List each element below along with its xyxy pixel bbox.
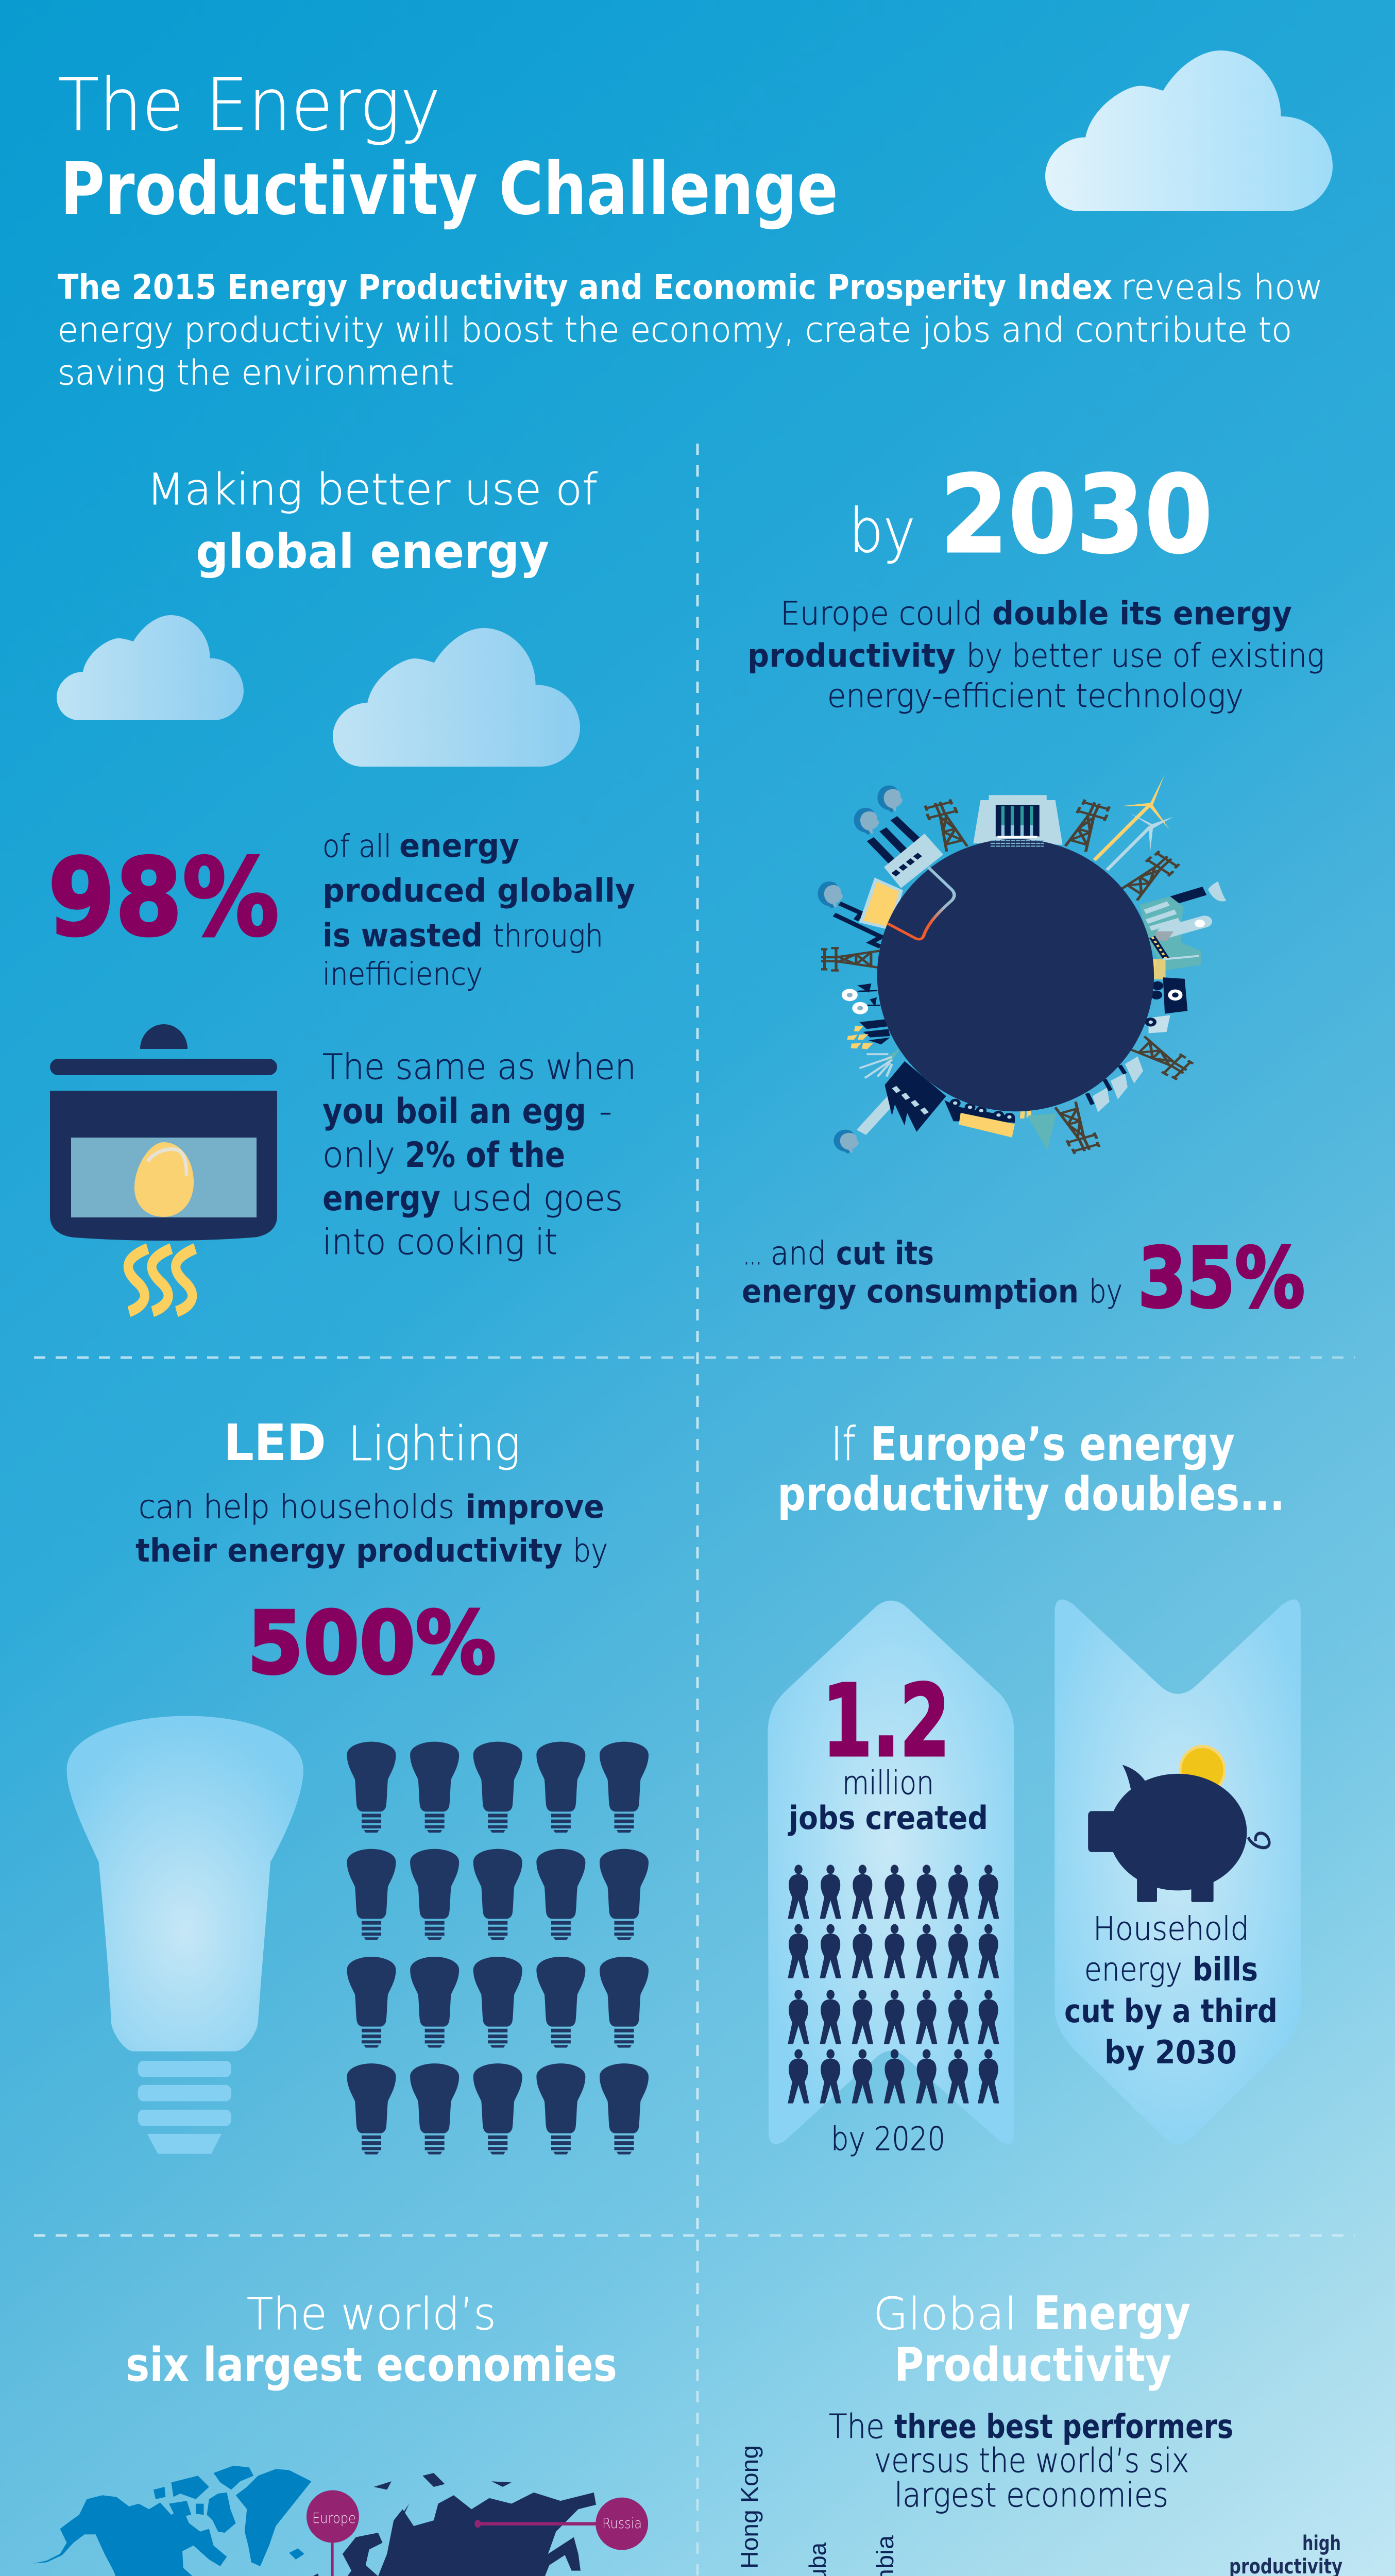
heading: global energy [147,464,598,579]
text: household energy bills: Household [1093,1910,1249,1947]
panel: global energy productivity [736,2286,1346,2576]
text: energy wasted: of all [322,828,392,865]
icon: large LED bulb [67,1716,303,2154]
intro text: saving the environment [58,353,454,393]
text: Europe could double [747,595,1324,715]
intro text: The 2015 Energy Productivity and Economic Prosperity Index [58,267,1112,307]
icon grid: small bulbs [347,1742,649,2155]
heading: global energy productivity [873,2286,1190,2392]
intro text: energy productivity will boost the economy, create jobs and contribute to [58,310,1292,350]
icon: small cloud [57,615,244,720]
heading: global energy: global energy [196,524,549,579]
panel: LED lighting [67,1414,649,2155]
text: energy wasted: produced globally [322,872,635,909]
title: The Energy [58,63,440,147]
heading: six largest economies: six largest economies [126,2338,617,2392]
illustration: globe with energy sources [818,775,1226,1154]
text: boil an egg: energy [322,1178,440,1219]
text: cut energy consumption: energy consumption [742,1273,1079,1310]
text: household energy bills: energy [1084,1951,1182,1988]
text: household energy bills [1064,1910,1278,2071]
heading: Europe's energy productivity doubles: Europe’s energy [870,1417,1235,1471]
text: energy wasted: is wasted [322,917,483,954]
text: boil an egg: The same as when [322,1047,636,1088]
text: energy wasted [322,827,635,992]
text: improve productivity: can help households [139,1488,454,1526]
icon: piggy bank with coin [1088,1747,1269,1902]
text: three best performers: three best performers [894,2408,1233,2446]
heading: LED Lighting [224,1414,520,1472]
heading: global energy productivity: Global [873,2289,1017,2340]
title: Productivity Challenge [60,147,838,231]
text: Europe could double: energy-efficient technology [827,677,1244,715]
intro text [58,267,1323,393]
title [58,63,838,231]
text: million jobs created: million [842,1764,934,1802]
text: household energy bills: cut by a third [1064,1992,1278,2030]
text: cut energy consumption: cut its [836,1234,934,1272]
heading: LED Lighting: Lighting [348,1416,520,1471]
text: cut energy consumption: and [771,1234,826,1272]
text: boil an egg [322,1047,636,1263]
heading: six largest economies [126,2289,617,2392]
heading: by 2030: by [849,495,915,566]
intro text: reveals how [1121,267,1323,307]
text: three best performers: largest economies [894,2477,1168,2515]
text: boil an egg: used goes [451,1178,623,1219]
text: million jobs created [787,1764,988,1837]
text: boil an egg: only [322,1135,395,1176]
text: improve productivity: by [573,1532,608,1569]
text: boil an egg: – [600,1091,611,1132]
axis: high productivity: high [1302,2532,1341,2555]
stat: 500%: 500% [247,1594,496,1693]
shape: jobs arrow [768,1601,1014,2144]
heading: LED Lighting: LED [224,1414,326,1472]
panel: making better use of global energy [48,464,636,1312]
text: three best performers: The [829,2408,884,2446]
icon: large cloud [333,628,580,767]
text: Europe could double: by better use of existing [966,637,1324,674]
bar chart [736,2445,1307,2576]
text: cut energy consumption: ... [743,1234,762,1272]
text: boil an egg: 2% of the [405,1135,565,1176]
stat: 1.2: 1.2 [822,1664,950,1779]
text: improve productivity: improve [466,1488,604,1526]
map label: Europe: Europe [312,2510,356,2527]
heading: Europe's energy productivity doubles: productivity doubles... [777,1467,1285,1521]
text: by 2020: by 2020 [831,2120,945,2158]
text: improve productivity: their energy productivity [135,1532,563,1569]
world map [18,2466,667,2576]
axis: high productivity [1229,2532,1346,2576]
text: energy wasted: through [493,918,603,954]
stat: 98%: 98% [48,836,279,960]
text: cut energy consumption [742,1234,1122,1310]
bar: Hong Kong: Hong Kong [736,2445,763,2569]
heading: by 2030 [849,453,1213,578]
text: household energy bills: by 2030 [1104,2033,1237,2071]
text: million jobs created: jobs created [787,1799,988,1837]
icon: pot with egg [50,1024,277,1312]
text: Europe could double: Europe could [780,595,982,632]
stat: 35%: 35% [1138,1230,1305,1326]
heading: Europe's energy productivity doubles [777,1417,1285,1521]
text: Europe could double: productivity [747,637,956,674]
text: three best performers [829,2408,1233,2515]
text: improve productivity [135,1488,608,1569]
text: three best performers: versus the world’s six [874,2442,1189,2480]
text: cut energy consumption: by [1089,1273,1122,1310]
panel: by 2030 [742,453,1324,1326]
panel: if Europe's productivity doubles [768,1417,1301,2158]
text: boil an egg: you boil an egg [322,1091,586,1132]
heading: global energy productivity: Productivity [894,2338,1171,2392]
icon grid: people [788,1865,999,2104]
heading: by 2030: 2030 [940,453,1213,578]
text: household energy bills: bills [1193,1951,1258,1988]
icon: cloud top right [1045,50,1333,211]
heading: global energy productivity: Energy [1033,2286,1190,2341]
text: energy wasted: energy [399,827,519,865]
heading: six largest economies: The world’s [247,2289,496,2340]
text: energy wasted: inefficiency [322,956,483,992]
text: Europe could double: double its energy [992,595,1292,632]
shape: bills arrow [1054,1599,1301,2145]
map label: Russia: Russia [602,2515,642,2532]
heading: Europe's energy productivity doubles: If [831,1417,856,1471]
panel: six largest economies [18,2289,667,2576]
text: boil an egg: into cooking it [322,1222,557,1263]
heading: global energy: Making better use of [147,464,598,515]
